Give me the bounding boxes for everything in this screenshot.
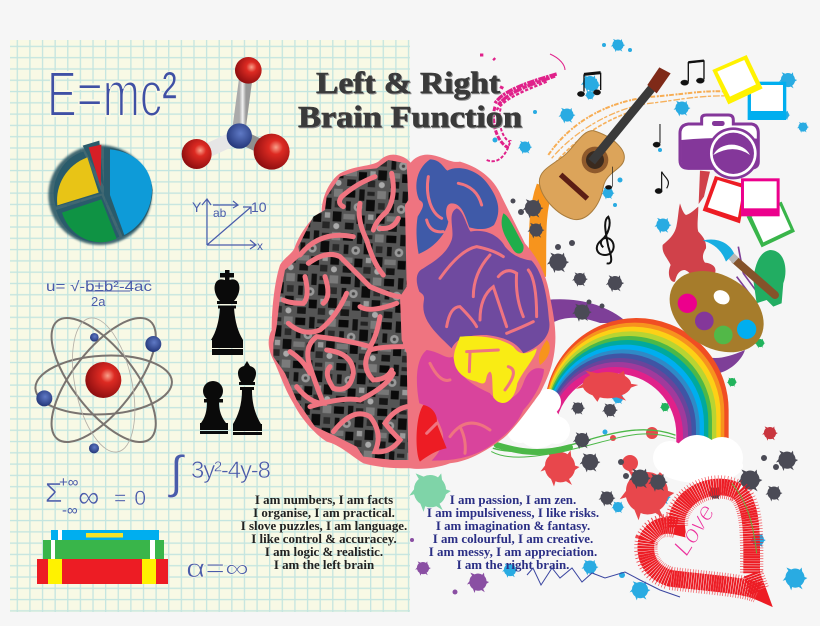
brain: [269, 155, 555, 469]
icon: guitar: [539, 67, 671, 220]
text block: right brain: I am impulsiveness, I like risks.: [427, 506, 599, 520]
text block: right brain: [427, 493, 599, 572]
icon: pie chart: [48, 141, 153, 245]
green scribble: [492, 430, 675, 457]
icon: atom: [33, 302, 174, 458]
icon: paint palette: [655, 254, 779, 369]
panel: left graph paper: [10, 40, 410, 612]
formula: integral: ∫: [167, 446, 185, 498]
graph sketch: Y: [192, 199, 202, 215]
text block: left brain: I organise, I am practical.: [253, 506, 395, 520]
text block: right brain: I am imagination & fantasy.: [436, 519, 590, 533]
formula: E=mc²: E=mc²: [47, 58, 177, 130]
magenta brush swoosh: [480, 54, 565, 161]
paint splats: blue: [492, 39, 809, 600]
icon: treble clef: [597, 217, 614, 264]
formula: infinite sum: +∞: [59, 474, 79, 491]
text block: left brain: I am logic & realistic.: [265, 545, 383, 559]
icon: camera: [680, 115, 759, 179]
rainbow: [548, 321, 725, 443]
icons: photo frames: [703, 55, 795, 247]
formula: quadratic: [46, 278, 152, 309]
title: Brain Function: [298, 99, 522, 134]
formula: infinite sum: [45, 474, 146, 519]
right hemisphere folds: [427, 177, 537, 453]
icon: chess king: [211, 270, 243, 355]
formula: infinite sum: Σ: [45, 477, 62, 508]
title: [298, 65, 522, 134]
clouds: [507, 389, 743, 483]
formula: infinite sum: -∞: [62, 502, 78, 519]
formula: infinite sum: = 0: [114, 487, 146, 510]
blue scribble line: [527, 568, 680, 597]
paint splats: purple and green: [409, 339, 765, 594]
text block: right brain: I am messy, I am appreciation.: [429, 545, 597, 559]
text block: left brain: I like control & accuracey.: [251, 532, 397, 546]
right hemisphere: yellow lobe: [454, 336, 537, 403]
icon: paintbrush: [703, 239, 775, 295]
left hemisphere folds: [283, 173, 407, 452]
right hemisphere: green lobe: [502, 213, 524, 254]
heart with Love: Love: [668, 499, 721, 560]
icon: molecule: [182, 57, 290, 170]
icon: chess queen: [233, 361, 262, 435]
graph sketch: x: [257, 239, 263, 253]
icon: books: [37, 530, 168, 584]
orange brush stroke: [537, 91, 740, 277]
right hemisphere: blue lobe: [416, 159, 498, 254]
right hemisphere: orange lobe: [539, 340, 550, 365]
right hemisphere: purple lobe: [417, 208, 549, 353]
graph sketch: ab: [213, 206, 227, 220]
title: Left & Right: [316, 65, 501, 100]
formula: integral: [167, 446, 271, 498]
paint splats: red: [540, 371, 778, 520]
brain outline: [269, 155, 555, 469]
right hemisphere: red lobe: [417, 405, 447, 462]
text block: left brain: I slove puzzles, I am language.: [241, 519, 407, 533]
purple brush strokes: [546, 299, 745, 374]
paint splat: green: [735, 247, 785, 307]
paint splat: large red: [663, 171, 716, 286]
left hemisphere circuitry: [273, 160, 408, 460]
text block: left brain: I am the left brain: [274, 558, 374, 572]
text block: right brain: I am passion, I am zen.: [450, 493, 576, 507]
text block: right brain: I am the right brain.: [457, 558, 569, 572]
formula: quadratic: 2a: [91, 294, 106, 309]
text block: left brain: [241, 493, 407, 572]
right hemisphere: magenta lobe: [417, 350, 544, 461]
text block: left brain: I am numbers, I am facts: [255, 493, 393, 507]
formula: alpha equals infinity: α=∞: [186, 553, 249, 583]
formula: quadratic: u= √-b±b²-4ac: [46, 278, 152, 294]
graph sketch: [192, 199, 267, 253]
formula: infinite sum: ∞: [78, 481, 99, 514]
text block: right brain: I am colourful, I am creative.: [433, 532, 593, 546]
paint splats: gray ink: [510, 198, 798, 506]
graph sketch: 10: [251, 199, 267, 215]
icons: music notes: [577, 61, 704, 194]
heart with Love: [646, 483, 758, 592]
formula: integral: 3y²-4y-8: [191, 457, 271, 484]
icon: chess pawn: [200, 381, 228, 434]
